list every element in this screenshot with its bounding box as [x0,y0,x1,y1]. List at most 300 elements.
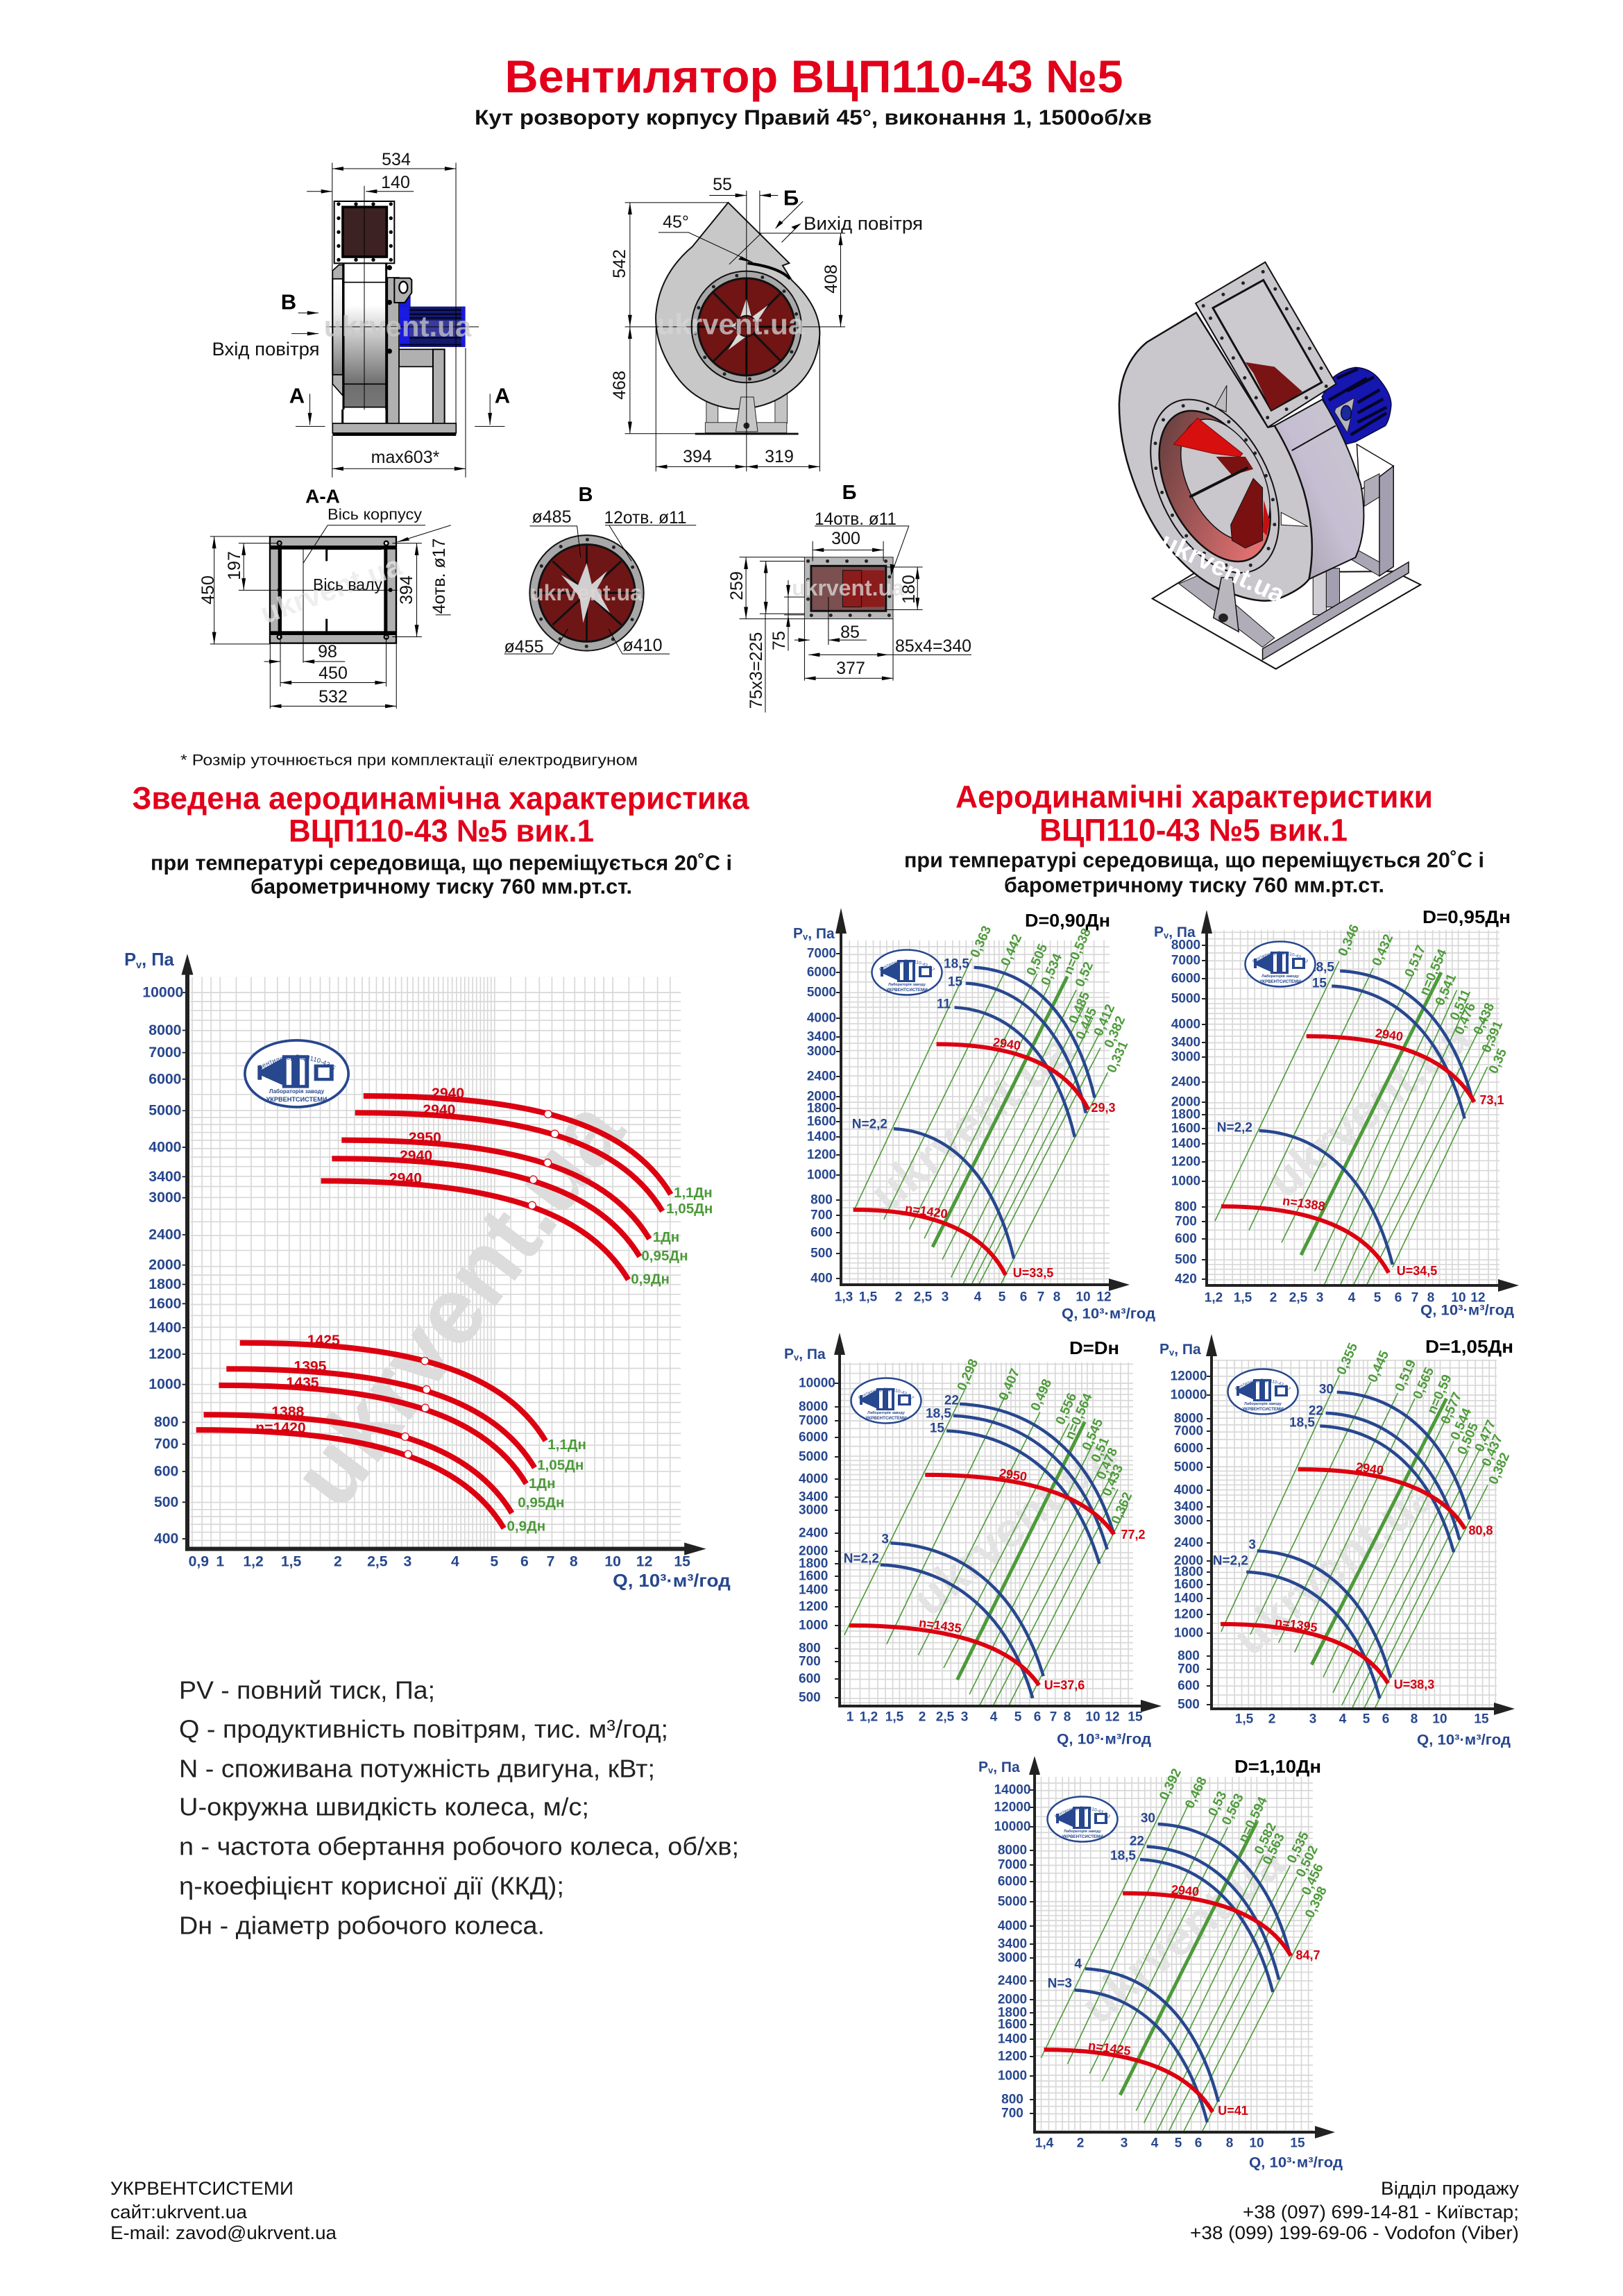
efficiency labels: n=0,564 [1062,1391,1096,1442]
y axis labels: 1000 [148,1376,181,1392]
3D view of fan [1119,262,1420,669]
efficiency labels: 0,382 [1102,1014,1128,1050]
y axis labels: 4000 [1174,1483,1203,1498]
efficiency labels: 0,565 [1411,1365,1437,1401]
y axis labels: 3000 [799,1503,828,1517]
curve labels: N=2,2 [852,1117,887,1131]
y axis labels: 1400 [1171,1137,1200,1151]
axis titles and chart title [793,910,1155,1322]
diameter labels: 0,9Дн [507,1518,545,1534]
y axis labels: 1000 [807,1167,836,1183]
x axis labels: 4 [990,1710,998,1724]
efficiency labels: 0,468 [1182,1775,1210,1811]
dimension text labels: 534 [382,150,411,169]
dimension text labels: ø455 [504,637,543,657]
pressure curves [1044,1893,1291,2112]
dimension text labels: 85х4=340 [895,636,971,656]
dimension text labels: Б [783,186,799,210]
curve labels [1217,976,1504,1278]
curve labels: U=37,6 [1044,1678,1085,1692]
efficiency labels: n=0,538 [1061,927,1094,977]
footer: sales contacts: +38 (099) 199-69-06 - Vodofon (Viber) [1190,2222,1519,2243]
dimension text labels: А [289,383,305,408]
y axis labels: 2400 [148,1226,181,1242]
axes [181,954,706,1555]
y axis labels: 800 [1178,1649,1200,1663]
axis titles and chart title: P [1154,925,1164,940]
y axis labels: 6000 [1171,972,1200,986]
drawing shapes: sections B and Б [529,535,893,651]
dimension text labels: 55 [713,175,732,194]
efficiency lines [1215,961,1490,1285]
diameter labels [507,1185,713,1534]
x axis labels: 4 [451,1553,459,1569]
curve labels: 2940 [1375,1026,1404,1044]
efficiency labels: 0,477 [1472,1418,1499,1454]
x axis labels: 10 [1085,1710,1101,1724]
power curves [894,968,1095,1258]
drawing watermarks: ukrvent.ua [324,310,472,343]
x axis labels: 2 [1270,1291,1277,1305]
grid [841,1362,1133,1705]
y axis labels: 1400 [148,1319,181,1335]
x axis labels: 2,5 [1289,1291,1308,1305]
y axis labels: 600 [1178,1678,1200,1694]
y axis labels: 4000 [148,1139,181,1155]
dimension text labels: 75 [770,631,789,650]
x axis labels: 6 [1195,2136,1202,2150]
curve labels: 22 [1130,1834,1144,1849]
x axis labels: 1,5 [281,1553,302,1569]
3D housing and inlet [1119,262,1363,632]
efficiency labels: n=0,59 [1425,1372,1455,1417]
logo: Вентилятор ВЦП110-43-5,7 [858,1388,915,1399]
dimension text labels: ø410 [623,636,662,655]
curve labels [1048,1812,1320,2118]
y axis labels: 6000 [148,1071,181,1087]
y axis labels: 3400 [799,1489,828,1505]
heading: right chart group [904,779,1484,897]
chart: D=Дн [784,1333,1162,1748]
y axis labels: 800 [810,1192,833,1208]
y axis labels: 600 [810,1226,833,1240]
y axis labels: 700 [799,1655,821,1669]
y axis labels [994,1782,1030,2121]
axis titles and chart title [1154,906,1514,1319]
heading: left summary chart [132,780,749,898]
dimension lines and arrows [210,162,971,713]
efficiency labels: 0,519 [1393,1358,1419,1394]
axis titles and chart title: v [1169,1347,1175,1358]
y axis labels: 1200 [1174,1607,1203,1621]
legend [179,1675,739,1939]
logo: Вентилятор ВЦП110-43-3,3 [1252,951,1308,963]
y axis labels: 2400 [807,1069,836,1084]
3D motor [1322,367,1391,444]
logo: УКРВЕНТСИСТЕМИ [266,1096,327,1103]
efficiency labels: 0,437 [1479,1433,1506,1469]
y axis labels: 6000 [998,1874,1027,1889]
y axis labels: 1600 [1171,1122,1200,1136]
curve labels: 84,7 [1295,1948,1320,1962]
diameter labels: 1Дн [529,1476,556,1492]
y axis labels: 2000 [148,1257,181,1273]
y axis labels: 1800 [998,2006,1027,2020]
x axis labels: 4 [1339,1712,1347,1727]
curve labels: 3 [881,1533,889,1546]
3D view watermark: ukrvent.ua [1156,527,1290,610]
rpm labels [255,1086,464,1436]
heading: right chart group: ВЦП110-43 №5 вик.1 [1039,812,1348,848]
axis titles and chart title: P [793,926,803,941]
axis titles and chart title: v [1164,930,1169,940]
dimension text labels: В [281,290,296,314]
y axis labels: 500 [1178,1698,1200,1712]
axis titles and chart title: D=0,90Дн [1025,910,1110,931]
drawing shapes: front view [656,203,819,434]
rpm labels: 1395 [294,1359,327,1375]
panel: technical drawings [198,150,971,713]
efficiency labels: 0,502 [1293,1843,1321,1880]
dimension text labels: 319 [765,447,794,466]
curve labels: n=1425 [1087,2038,1132,2058]
footer: sales contacts [1190,2178,1520,2243]
dimension text labels: 450 [198,575,218,605]
pressure curves [853,1044,1088,1275]
x axis labels: 2,5 [914,1290,933,1305]
efficiency labels: 0,476 [1452,1001,1479,1037]
x axis labels: 1 [847,1710,854,1724]
dimension text labels: 542 [610,249,629,278]
y axis labels: 600 [154,1464,178,1480]
y axis labels: 700 [154,1436,178,1452]
y axis labels: 1200 [799,1599,828,1614]
efficiency labels: 0,51 [1089,1435,1112,1464]
x axis labels: 2 [334,1553,342,1569]
efficiency labels: 0,505 [1024,942,1051,978]
efficiency labels: 0,445 [1073,1006,1100,1042]
x axis labels: 15 [1290,2136,1305,2150]
heading: right chart group: при температурі середовища, що переміщується 20˚C і [904,848,1484,872]
x axis labels: 6 [520,1553,529,1569]
footer: company contacts [110,2178,337,2243]
title: Вентилятор ВЦП110-43 №5 [505,51,1123,102]
efficiency labels [1336,922,1510,1076]
y axis labels: 500 [1175,1252,1197,1267]
y axis labels: 1400 [998,2032,1027,2046]
dimension text labels: 532 [318,687,348,707]
diameter labels: 1,1Дн [547,1437,586,1453]
curve labels: 3 [1248,1538,1256,1552]
efficiency labels: 0,556 [1053,1391,1080,1427]
dimension text labels: 394 [683,447,712,466]
y axis labels: 800 [799,1641,821,1656]
curve labels: N=2,2 [844,1552,879,1566]
y axis labels: 700 [1178,1662,1200,1677]
efficiency labels: 0,407 [996,1367,1023,1403]
y axis labels: 1000 [1174,1626,1203,1641]
curve labels: 2940 [992,1035,1021,1053]
y axis labels: 1800 [799,1556,828,1571]
x axis labels: 1 [216,1553,224,1569]
curve labels: 18,5 [944,956,969,972]
watermark: ukrvent.ua [1223,1466,1446,1666]
logo [1245,941,1316,987]
axes [835,908,1130,1291]
chart: D=0,95Дн [1154,906,1519,1319]
x axis labels: 1,5 [1235,1712,1254,1727]
y axis labels: 700 [1001,2106,1023,2121]
y axis labels: 1200 [148,1347,181,1362]
axes [834,1333,1162,1712]
curve labels: U=34,5 [1397,1264,1437,1278]
y axis labels: 5000 [807,986,836,999]
y axis labels: 3400 [148,1169,181,1185]
dimension text labels: 45° [663,212,689,232]
y axis labels: 10000 [994,1820,1030,1834]
footer: sales contacts: +38 (097) 699-14-81 - Київстар; [1243,2202,1519,2222]
logo: УКРВЕНТСИСТЕМИ [1242,1407,1284,1412]
legend: η-коефіцієнт корисної дії (ККД); [179,1871,564,1900]
grid [190,977,681,1546]
axis titles and chart title: , Па [808,926,835,941]
axis titles and chart title: v [988,1764,994,1775]
x axis labels: 3 [1316,1291,1323,1305]
dimension text labels: 408 [822,264,841,294]
y axis labels: 2000 [807,1090,836,1104]
x axis labels: 1,5 [1234,1291,1252,1305]
dimension text labels: ø485 [532,507,571,527]
efficiency labels: 0,35 [1486,1046,1510,1076]
dimension text labels: 85 [840,623,860,642]
y axis labels: 1600 [998,2017,1027,2032]
power curves [1246,1392,1470,1698]
y axis labels: 400 [810,1272,833,1285]
axes [1029,1756,1335,2138]
y axis labels: 3000 [148,1190,181,1206]
dimension text labels: 197 [225,551,244,580]
dimension text labels: Б [842,482,856,504]
y axis labels: 1600 [799,1569,828,1584]
drawing watermarks: ukrvent.ua [256,548,406,630]
x axis labels: 7 [547,1553,554,1569]
x axis labels: 1,5 [859,1290,878,1305]
x axis labels: 15 [1474,1712,1489,1727]
rpm labels: 1435 [286,1375,319,1391]
efficiency labels: 0,442 [999,932,1025,968]
y axis labels: 3000 [807,1044,836,1059]
heading: left summary chart: ВЦП110-43 №5 вик.1 [289,813,594,848]
legend: PV - повний тиск, Па; [179,1675,435,1705]
y axis labels: 7000 [1171,954,1200,968]
x axis labels: 10 [1432,1712,1447,1727]
efficiency labels: 0,362 [1109,1490,1135,1526]
heading: right chart group: барометричному тиску 760 мм.рт.ст. [1004,873,1384,897]
logo: Вентилятор ВЦП110-43-6,3 [1055,1806,1110,1818]
y axis labels: 14000 [994,1782,1030,1798]
y axis labels: 600 [1175,1231,1197,1247]
x axis labels [1235,1712,1489,1727]
x axis labels: 3 [942,1290,949,1305]
curve labels: 15 [930,1421,944,1435]
x axis labels [189,1553,690,1569]
x axis labels: 10 [1451,1291,1466,1305]
curve labels [852,956,1116,1280]
efficiency lines [1221,1375,1488,1709]
dimension text labels: 300 [831,529,860,548]
curve labels: 77,2 [1121,1528,1146,1542]
efficiency labels: 0,544 [1448,1406,1475,1442]
heading: left summary chart: барометричному тиску 760 мм.рт.ст. [250,875,632,898]
y axis labels: 1800 [1171,1108,1200,1122]
logo: Вентилятор ВЦП110-43-5,7 [1235,1378,1291,1390]
drawing watermarks: ukrvent.ua [792,575,904,600]
x axis labels: 6 [1020,1290,1027,1305]
x axis labels: 4 [1348,1291,1356,1305]
curve labels: n=1435 [918,1616,962,1635]
x axis labels: 12 [1105,1710,1120,1724]
y axis labels: 500 [154,1494,178,1510]
x axis labels: 12 [1096,1290,1112,1305]
logo [1228,1369,1298,1415]
drawing watermarks: ukrvent.ua [530,580,643,605]
x axis labels: 10 [1076,1290,1091,1305]
curve labels: U=41 [1218,2104,1248,2118]
y axis labels: 6000 [799,1430,828,1445]
y axis labels: 3400 [1174,1499,1203,1514]
efficiency labels: 0,412 [1091,1002,1118,1038]
axis titles: , Па [142,950,175,970]
legend: N - споживана потужність двигуна, кВт; [179,1755,655,1782]
x axis labels: 3 [1121,2136,1128,2150]
x axis labels: 5 [1363,1712,1370,1727]
x axis labels: 0,9 [189,1553,209,1569]
y axis labels: 1600 [807,1115,836,1129]
axis titles and chart title: P [784,1347,794,1362]
x axis labels [835,1290,1112,1305]
dimension text labels: 468 [610,371,629,400]
y axis labels: 6000 [807,965,836,980]
y axis labels: 700 [1175,1215,1197,1229]
diameter labels: 1,1Дн [674,1185,713,1201]
x axis labels: 1,2 [860,1710,878,1724]
y axis labels: 8000 [799,1399,828,1415]
efficiency labels [1157,1766,1330,1921]
pressure curves [1221,1469,1465,1683]
y axis labels: 1600 [1174,1577,1203,1592]
x axis labels: 8 [1427,1291,1434,1305]
logo: УКРВЕНТСИСТЕМИ [886,988,928,993]
heading: right chart group: Аеродинамічні характеристики [955,779,1433,815]
dimension text labels: Вісь валу [313,575,382,593]
y axis labels: 500 [799,1691,821,1705]
watermark: ukrvent.ua [271,1079,644,1526]
logo: Лабораторія заводу [1064,1829,1101,1834]
dimension text labels: 180 [899,575,919,604]
curve labels: 11 [937,997,951,1012]
efficiency labels [968,924,1131,1075]
legend: n - частота обертання робочого колеса, об/хв; [179,1832,739,1860]
x axis labels: 7 [1037,1290,1044,1305]
efficiency labels: 0,391 [1479,1019,1506,1055]
y axis labels: 2400 [1174,1535,1203,1551]
efficiency labels: 0,517 [1402,943,1429,979]
axes [1206,1334,1515,1715]
curve labels: 80,8 [1468,1523,1493,1537]
diameter labels: 0,9Дн [631,1272,670,1288]
logo: УКРВЕНТСИСТЕМИ [1062,1834,1103,1839]
curve labels: n=1395 [1274,1615,1318,1635]
y axis labels: 3000 [998,1950,1027,1966]
y axis labels: 3400 [998,1936,1027,1952]
y axis labels: 4000 [807,1011,836,1026]
efficiency labels: 0,563 [1260,1831,1288,1867]
y axis labels: 3400 [1171,1036,1200,1049]
y axis labels: 1400 [1174,1591,1203,1606]
axis titles and chart title: , Па [799,1347,826,1362]
subtitle: Кут розвороту корпусу Правий 45°, виконання 1, 1500об/хв [475,105,1152,129]
watermark: ukrvent.ua [901,1426,1125,1626]
footer: company contacts: УКРВЕНТСИСТЕМИ [110,2178,294,2199]
dimension text labels: 377 [836,659,865,678]
y axis labels: 1600 [148,1296,181,1312]
diameter labels: 0,95Дн [641,1248,688,1264]
drawing watermarks: ukrvent.ua [657,308,805,340]
y axis labels: 8000 [998,1843,1027,1857]
efficiency labels: 0,331 [1105,1039,1131,1075]
rpm labels: 2940 [423,1102,455,1118]
curve labels: 30 [1141,1812,1155,1825]
footnote: * Розмір уточнюється при комплектації електродвигуном [180,751,638,769]
y axis labels: 1800 [807,1101,836,1116]
heading: left summary chart: Зведена аеродинамічна характеристика [132,780,749,816]
drawing watermarks [256,308,904,630]
efficiency labels: 0,485 [1067,990,1093,1026]
axis titles and chart title: D=1,10Дн [1234,1756,1321,1777]
x axis labels [1205,1291,1486,1305]
red curves: upper group [321,1096,671,1280]
diameter labels: 1,05Дн [666,1201,713,1217]
curve labels: 2940 [1171,1882,1200,1899]
pressure curves [849,1475,1114,1685]
logo: Лабораторія заводу [1244,1401,1282,1406]
dimension text labels: Вісь корпусу [328,505,422,523]
x axis labels: 2 [1268,1712,1275,1727]
efficiency labels: 0,53 [1205,1789,1230,1818]
diameter labels: 1Дн [653,1229,679,1245]
rpm labels: 2940 [432,1086,464,1101]
dimension text labels: 4отв. ø17 [430,539,449,614]
axis titles and chart title [1159,1336,1513,1748]
dimension text labels: 140 [381,173,410,192]
y axis labels: 5000 [1174,1460,1203,1474]
rpm labels: 1425 [307,1333,340,1349]
x axis labels: 2,5 [367,1553,388,1569]
efficiency labels: 0,298 [955,1357,981,1393]
power curves [1074,1824,1289,2122]
power curves [1259,971,1473,1265]
heading: left summary chart: при температурі середовища, що переміщується 20˚C і [151,851,732,875]
watermark: ukrvent.ua [1071,1834,1294,2034]
y axis labels: 1400 [799,1582,828,1598]
grid [1199,1163,1623,1871]
efficiency labels: 0,346 [1336,922,1362,959]
efficiency lines [853,959,1107,1285]
y axis labels: 12000 [994,1800,1030,1814]
efficiency labels: 0,545 [1080,1417,1106,1453]
axis titles: P [124,950,136,970]
axis titles and chart title: P [1159,1341,1169,1358]
